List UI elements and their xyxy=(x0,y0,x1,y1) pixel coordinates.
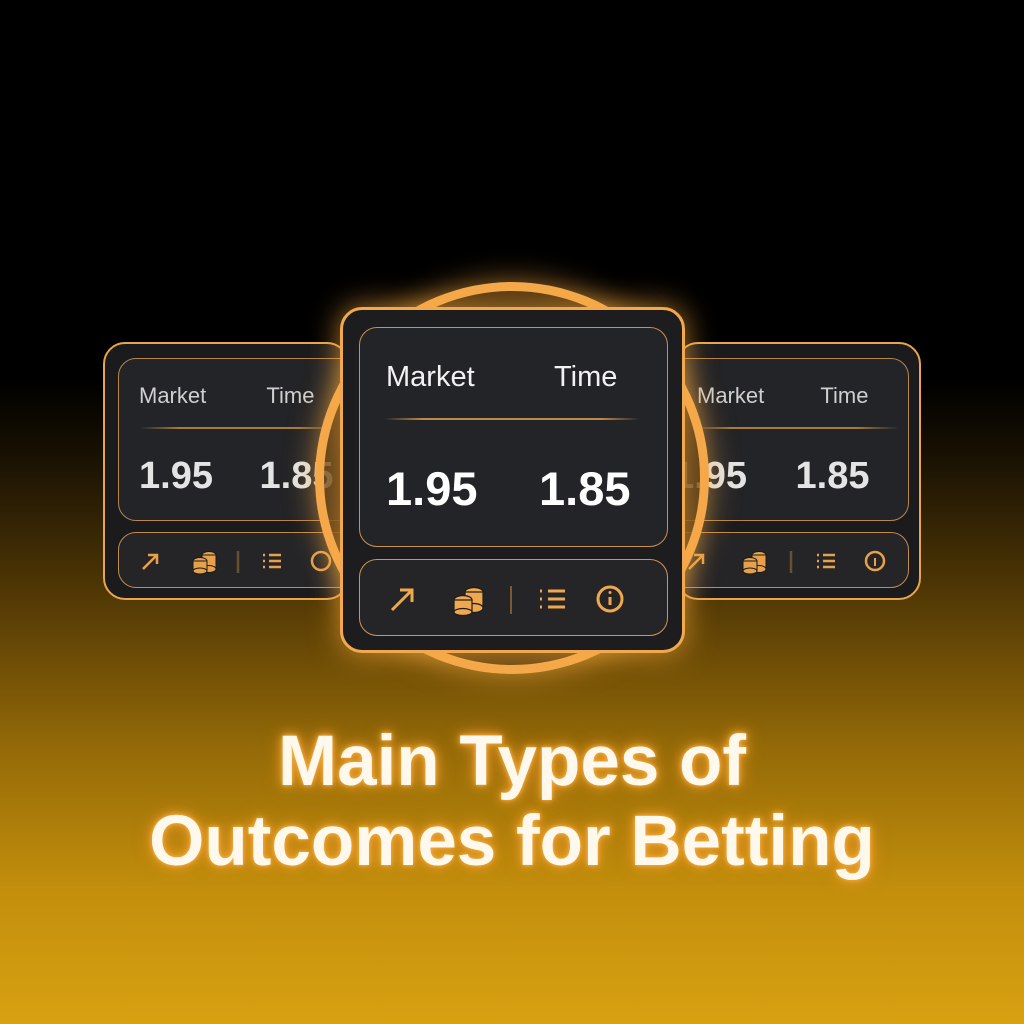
card: left xyxy=(103,342,349,600)
center labels: Market xyxy=(386,361,475,393)
title xyxy=(144,722,879,886)
glow ring xyxy=(315,282,709,674)
center top panel: Time xyxy=(554,361,617,393)
left odds: 1.95 1.85 xyxy=(139,455,334,497)
left labels: Market Time xyxy=(139,383,314,408)
center icon bar xyxy=(359,559,668,636)
title: Main Types of xyxy=(278,722,746,801)
title: Outcomes for Betting xyxy=(149,802,875,881)
center top panel xyxy=(359,327,668,547)
right labels: Market Time xyxy=(697,383,868,408)
center odds: 1.95 xyxy=(386,462,477,515)
card: center xyxy=(340,307,685,653)
right icon bar xyxy=(668,532,909,588)
card: right xyxy=(676,342,921,600)
left icon bar xyxy=(118,532,358,588)
right odds: 1.95 1.85 xyxy=(673,455,870,497)
right top panel xyxy=(668,358,909,521)
center top panel: 1.85 xyxy=(539,462,630,515)
left top panel xyxy=(118,358,358,521)
